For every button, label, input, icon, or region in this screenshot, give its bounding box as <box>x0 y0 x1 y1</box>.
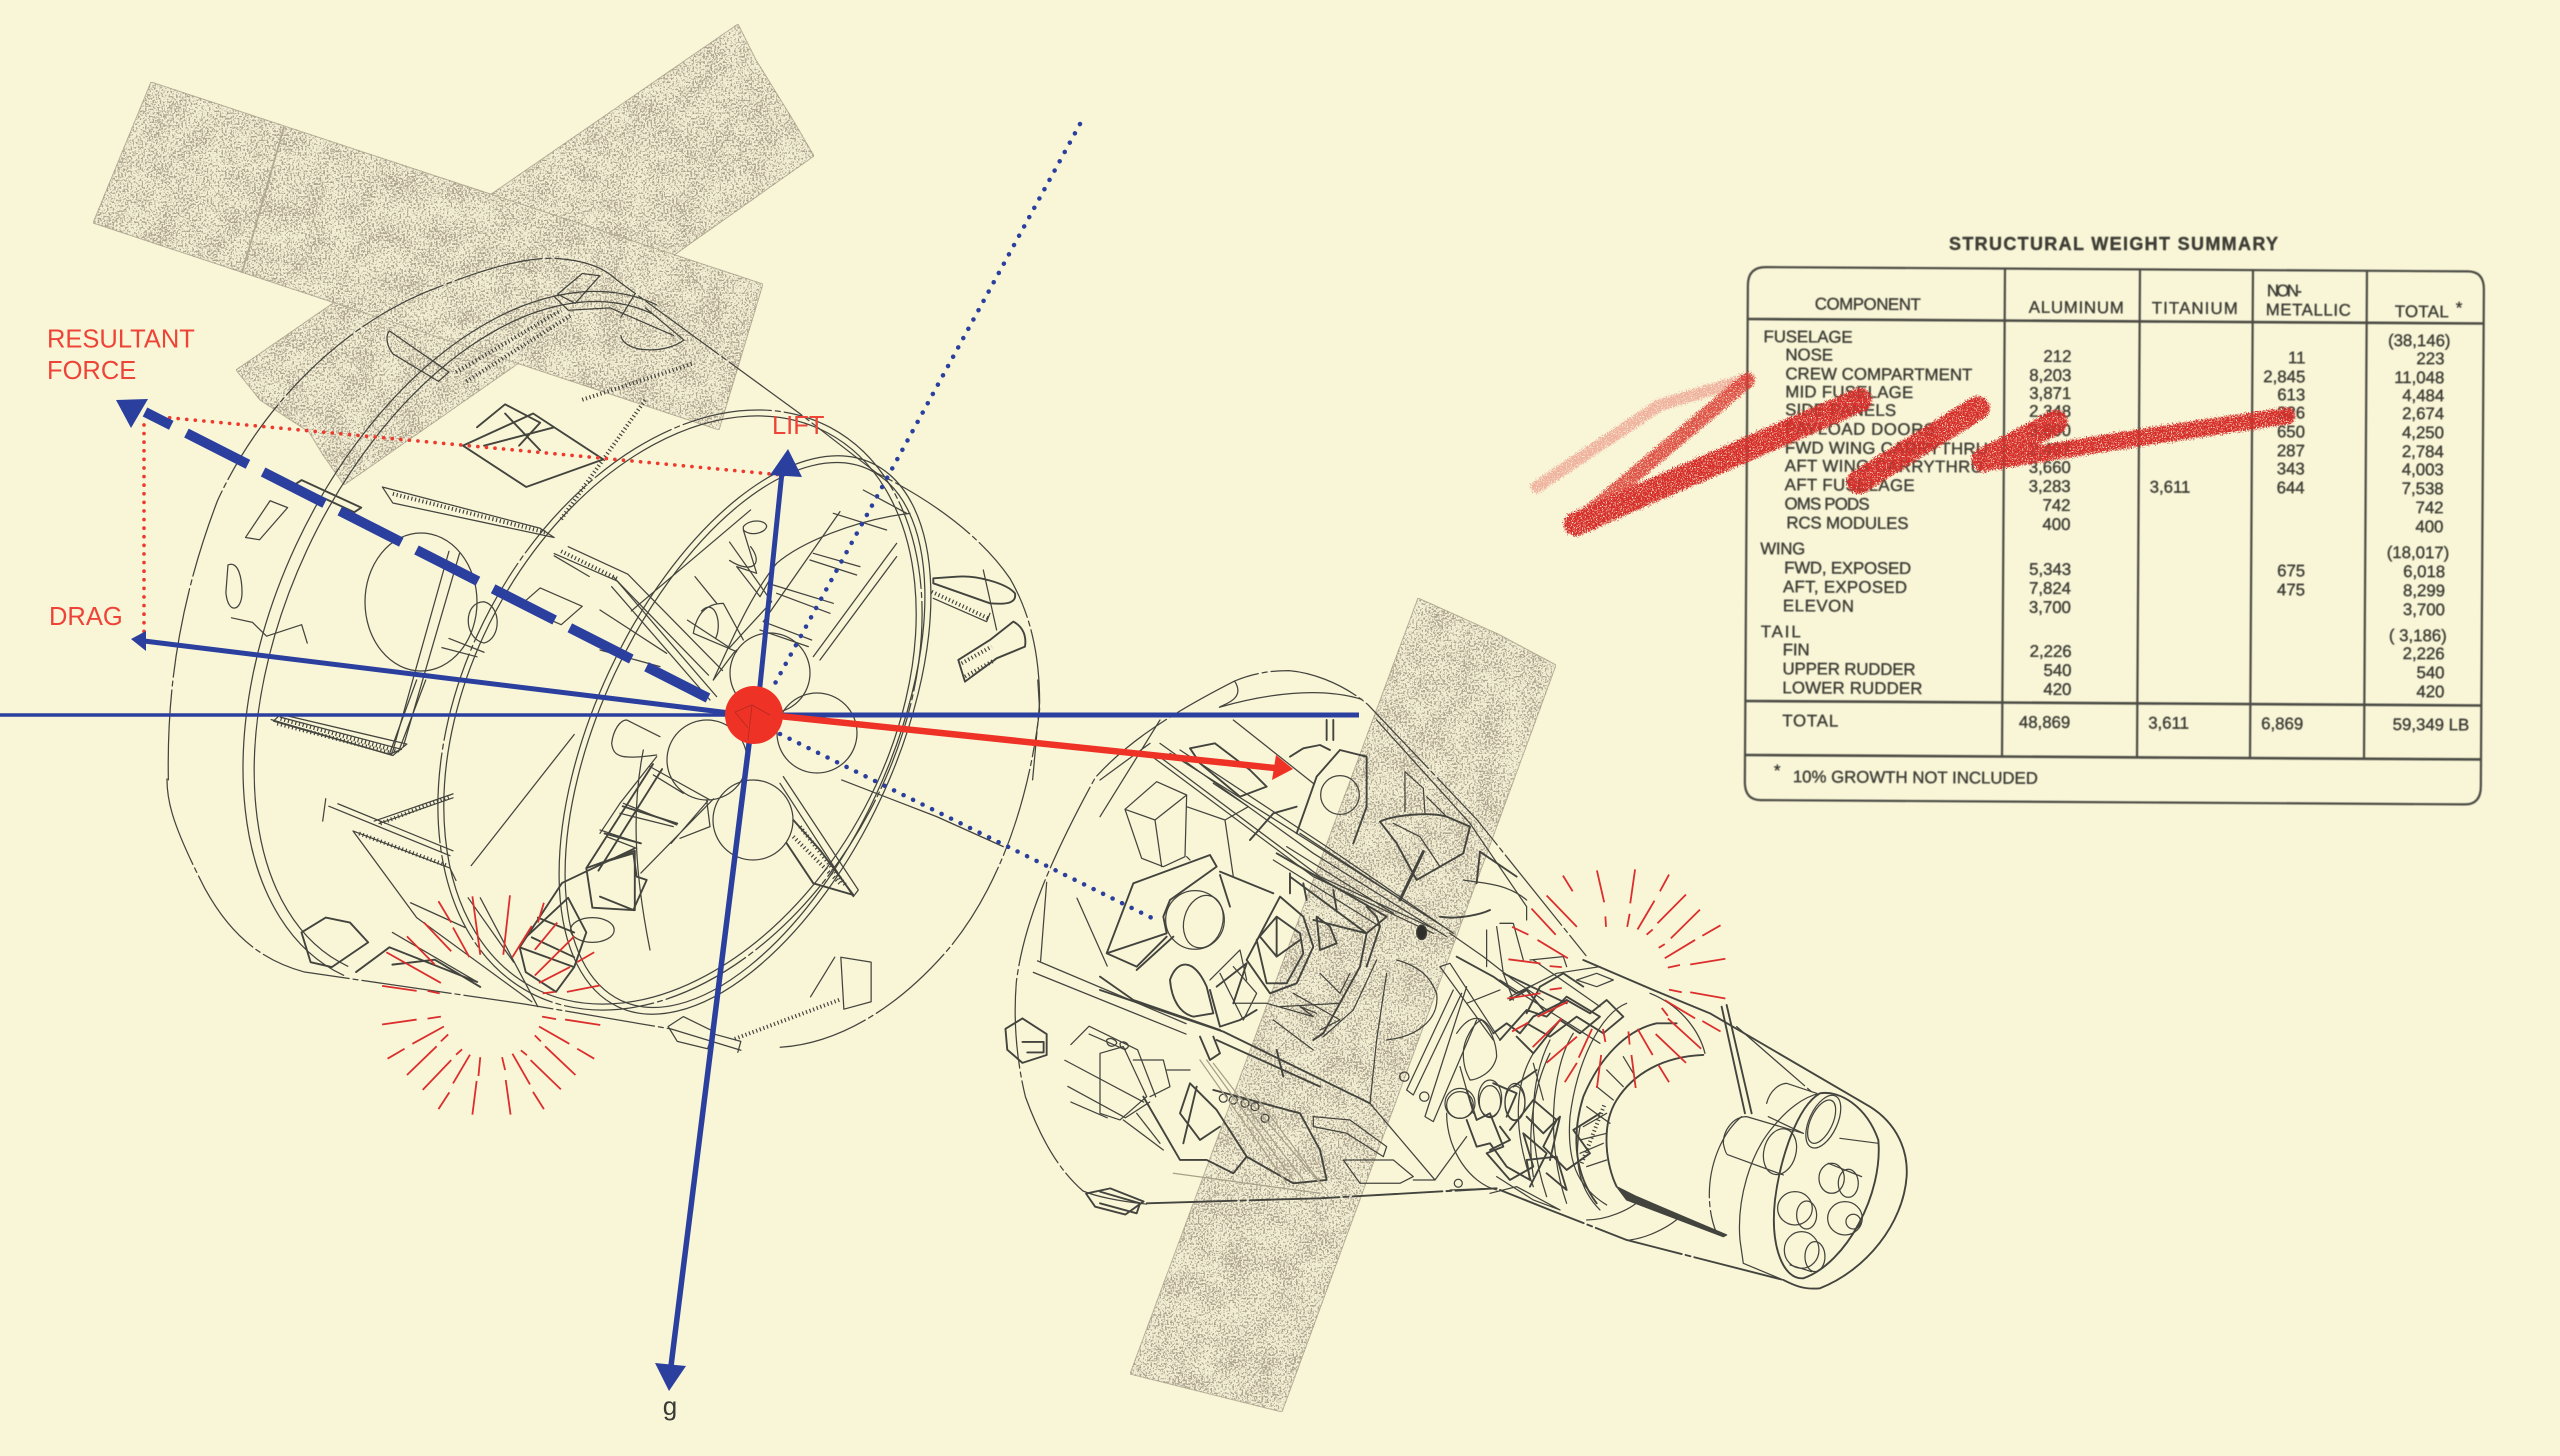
total column: 59,349 LB <box>2393 715 2469 734</box>
total column: 223 <box>2416 349 2445 368</box>
table body: NOSE <box>1785 345 1833 365</box>
table title: STRUCTURAL WEIGHT SUMMARY <box>1949 234 2278 254</box>
aluminum column: 742 <box>2042 496 2071 515</box>
total column: 540 <box>2416 663 2445 682</box>
non-metallic column: 650 <box>2277 422 2305 441</box>
total column: 400 <box>2415 517 2443 536</box>
label: resultant force: FORCE <box>47 357 136 385</box>
total column: 420 <box>2416 682 2444 701</box>
burst: right capsule impact <box>1507 869 1725 1088</box>
aluminum column <box>2019 347 2074 732</box>
total column: 742 <box>2415 498 2444 517</box>
table body: MID FUSELAGE <box>1785 382 1913 402</box>
table body: 10% GROWTH NOT INCLUDED <box>1793 767 2038 788</box>
aluminum column: 400 <box>2042 515 2070 534</box>
dotted axis: long upper right <box>772 124 1080 689</box>
arrow: gravity <box>655 720 752 1391</box>
table body: CREW COMPARTMENT <box>1785 364 1972 384</box>
table: structural weight summary <box>1745 234 2484 804</box>
dotted axis: toward right capsule <box>780 734 1152 918</box>
table body: FWD, EXPOSED <box>1784 558 1911 578</box>
table body: AFT, EXPOSED <box>1783 577 1907 597</box>
non-metallic column: 675 <box>2277 561 2305 580</box>
arrow: lift <box>757 449 802 715</box>
label: drag: DRAG <box>49 603 123 631</box>
tape: upper diagonal strip <box>236 24 814 485</box>
total column: 11,048 <box>2394 368 2444 387</box>
table body: FWD WING CARRYTHRU <box>1785 438 1988 458</box>
total column: (38,146) <box>2388 331 2451 350</box>
red dotted construction lines <box>144 417 782 640</box>
table body: SIDE PANELS <box>1785 400 1896 420</box>
aluminum column: 2,348 <box>2029 402 2071 421</box>
titanium column: 3,611 <box>2150 477 2190 497</box>
arrow: resultant force (dashed) <box>116 399 708 698</box>
table body: ALUMINUM <box>2029 298 2124 317</box>
total column: 4,484 <box>2402 386 2444 405</box>
label: resultant force: RESULTANT <box>47 326 195 354</box>
aluminum column: 48,869 <box>2019 713 2070 732</box>
total column: 2,674 <box>2402 404 2444 423</box>
table body: FIN <box>1783 640 1810 659</box>
table body: ELEVON <box>1783 596 1854 616</box>
non-metallic column: 343 <box>2277 459 2305 478</box>
arrow: drag <box>131 631 730 713</box>
total column: 2,784 <box>2402 442 2444 461</box>
table body: LOWER RUDDER <box>1782 678 1922 698</box>
non-metallic column: 2,845 <box>2263 367 2305 386</box>
table body: UPPER RUDDER <box>1782 659 1916 679</box>
table body: AFT WING CARRYTHRU <box>1785 456 1983 476</box>
table body: * <box>2456 298 2463 317</box>
total column: 6,018 <box>2403 562 2445 581</box>
aluminum column: 7,824 <box>2029 579 2071 598</box>
red crayon scribble <box>1537 380 2287 524</box>
total column: ( 3,186) <box>2389 626 2447 645</box>
table body: PAYLOAD DOORS <box>1785 419 1935 439</box>
table body: METALLIC <box>2266 300 2351 320</box>
titanium column <box>2148 477 2190 733</box>
aluminum column: 540 <box>2043 661 2072 680</box>
total column: 8,299 <box>2403 581 2445 600</box>
aluminum column: 5,343 <box>2029 560 2071 579</box>
aluminum column: 2,497 <box>2029 440 2071 459</box>
aluminum column: 2,226 <box>2030 642 2072 661</box>
tape: lower strip behind right capsule <box>1130 598 1556 1412</box>
table body <box>1745 267 2484 804</box>
non-metallic column <box>2261 348 2307 733</box>
aluminum column: 3,660 <box>2029 458 2071 477</box>
non-metallic column: 11 <box>2288 348 2306 367</box>
aluminum column: 3,871 <box>2029 384 2071 403</box>
aluminum column: 3,600 <box>2029 421 2071 440</box>
total column: 2,226 <box>2403 644 2445 663</box>
centre of gravity dot <box>725 686 783 744</box>
burst: left capsule impact <box>382 895 600 1115</box>
table body: RCS MODULES <box>1786 513 1908 533</box>
table body: OMS PODS <box>1784 494 1870 514</box>
table body: WING <box>1760 539 1805 558</box>
tape: upper wide strip <box>93 82 763 430</box>
non-metallic column: 475 <box>2277 580 2305 599</box>
non-metallic column: 326 <box>2277 403 2305 422</box>
aluminum column: 212 <box>2043 347 2072 366</box>
aluminum column: 420 <box>2043 680 2071 699</box>
total column: (18,017) <box>2387 543 2449 562</box>
titanium column: 3,611 <box>2148 713 2189 733</box>
total column: 3,700 <box>2403 600 2445 619</box>
total column <box>2386 331 2472 734</box>
table body: COMPONENT <box>1815 294 1921 314</box>
table body: FUSELAGE <box>1764 327 1853 347</box>
aluminum column: 3,700 <box>2029 598 2071 617</box>
aluminum column: 3,283 <box>2029 477 2071 496</box>
non-metallic column: 613 <box>2277 385 2305 404</box>
label: lift: LIFT <box>772 412 824 440</box>
total column: 4,250 <box>2402 423 2444 442</box>
horizontal axis line <box>0 713 1359 717</box>
total column: 7,538 <box>2402 479 2444 498</box>
non-metallic column: 6,869 <box>2261 714 2303 733</box>
label: g: g <box>663 1391 677 1421</box>
non-metallic column: 287 <box>2277 441 2305 460</box>
non-metallic column: 644 <box>2277 478 2305 497</box>
table body: TOTAL <box>1782 711 1838 731</box>
table body: AFT FUSELAGE <box>1785 475 1915 495</box>
line drawing: right capsule <box>1005 671 1907 1289</box>
table body: TAIL <box>1761 622 1801 641</box>
table body: * <box>1774 761 1781 780</box>
aluminum column: 8,203 <box>2029 366 2071 385</box>
line drawing: left capsule <box>140 210 1040 1093</box>
table body: NON- <box>2267 281 2302 300</box>
table body: TOTAL <box>2395 302 2449 321</box>
arrow: red velocity vector <box>760 714 1293 780</box>
table body: TITANIUM <box>2152 298 2238 318</box>
total column: 4,003 <box>2402 460 2444 479</box>
